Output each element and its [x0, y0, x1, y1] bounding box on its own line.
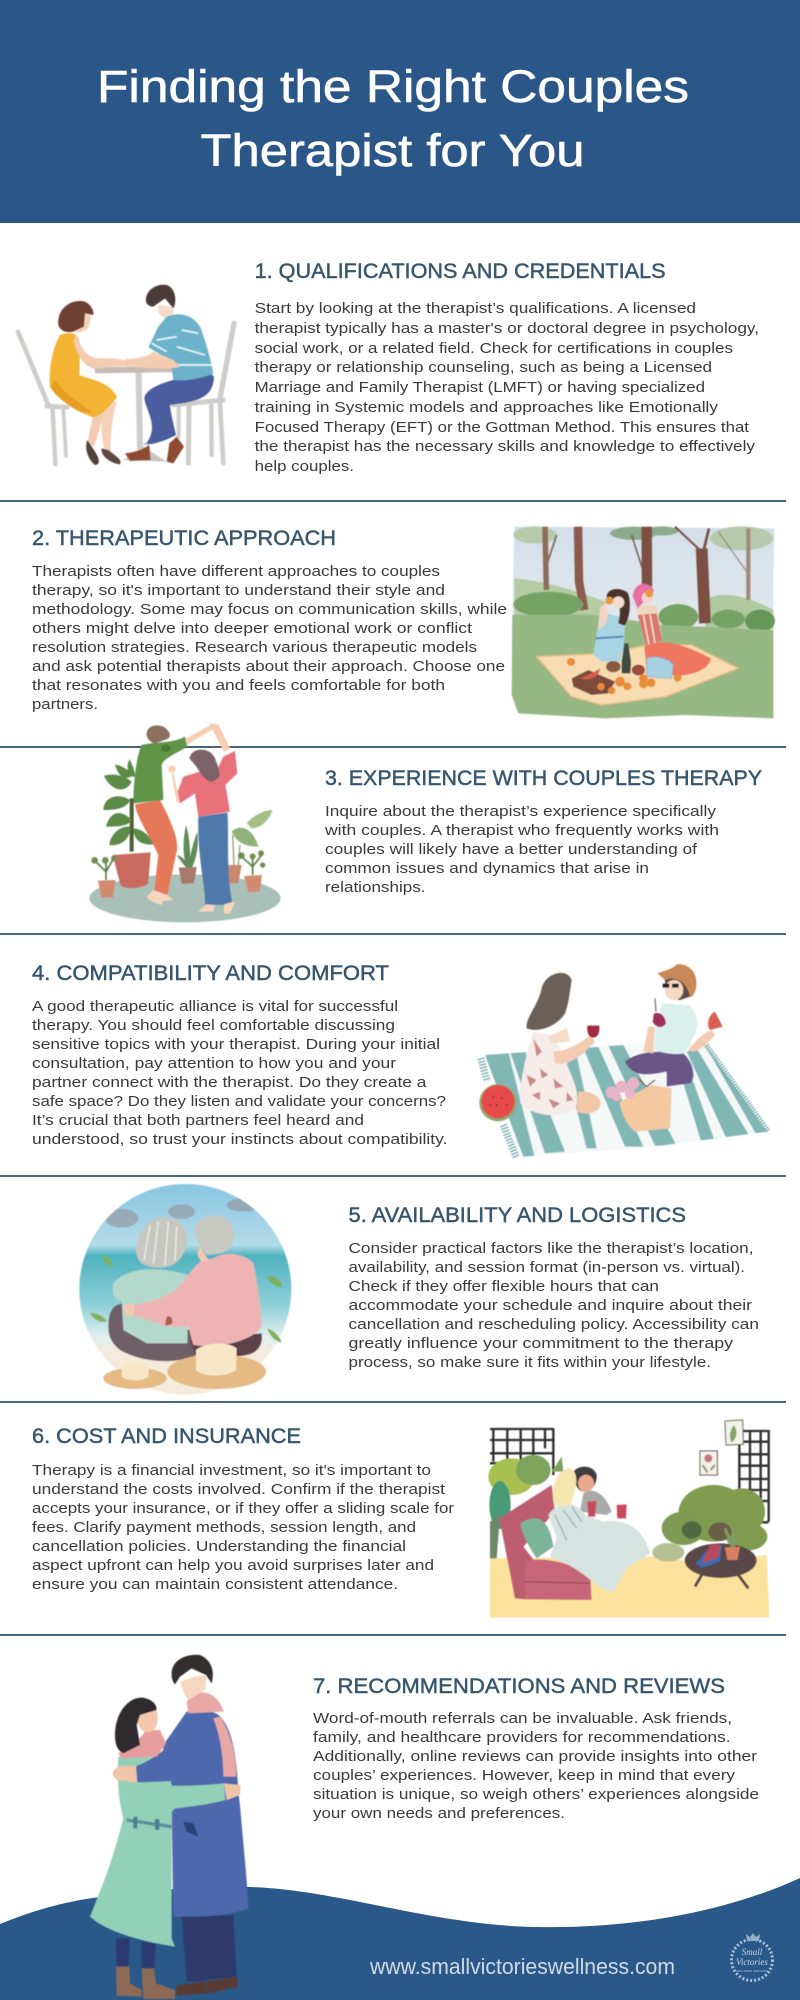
body text 4: It’s crucial that both partners feel heard and — [32, 1112, 364, 1129]
body text 1: Start by looking at the therapist’s qualifications. A licensed — [255, 300, 696, 317]
panel: qualifications and credentials — [18, 260, 759, 475]
body text 2: others might delve into deeper emotional work or conflict — [32, 620, 473, 637]
panel: recommendations and reviews — [90, 1655, 759, 1999]
illustration: embracing couple in winter coats — [90, 1655, 248, 1999]
body text 2: Therapists often have different approaches to couples — [32, 563, 440, 580]
panel: therapeutic approach — [32, 526, 775, 718]
heading 6: 6. COST AND INSURANCE — [32, 1425, 301, 1448]
body text 5: accommodate your schedule and inquire about their — [348, 1297, 752, 1314]
title: Finding the Right Couples — [97, 61, 689, 112]
body text 3: couples will likely have a better understanding of — [325, 841, 698, 858]
body text 2: and ask potential therapists about their approach. Choose one — [32, 658, 505, 675]
illustration: picnic in a park — [512, 526, 775, 718]
panel: compatibility and comfort — [32, 962, 768, 1158]
body text 6: accepts your insurance, or if they offer a sliding scale for — [32, 1500, 454, 1517]
body text 6: understand the costs involved. Confirm if the therapist — [32, 1481, 446, 1498]
body text 3: Inquire about the therapist’s experience specifically — [325, 803, 717, 820]
footer website address: www.smallvictorieswellness.com — [369, 1954, 675, 1979]
body text 2 — [32, 563, 507, 713]
illustration: couple on a sofa with plants — [488, 1420, 769, 1618]
footer wave — [0, 1878, 800, 2000]
body text 7: Additionally, online reviews can provide insights into other — [313, 1748, 757, 1765]
footer logo badge: WELLNESS SERVICES — [736, 1969, 768, 1973]
body text 1: therapy or relationship counseling, such as being a Licensed — [255, 359, 712, 376]
body text 3: with couples. A therapist who frequently works with — [324, 822, 719, 839]
body text 5: greatly influence your commitment to the therapy — [348, 1335, 734, 1352]
body text 1: help couples. — [255, 458, 354, 475]
title: Therapist for You — [200, 125, 584, 176]
body text 1: Marriage and Family Therapist (LMFT) or having specialized — [255, 379, 705, 396]
body text 1 — [255, 300, 759, 475]
body text 5: cancellation and rescheduling policy. Accessibility can — [348, 1316, 759, 1333]
footer logo badge — [732, 1933, 772, 1980]
body text 5: process, so make sure it fits within your lifestyle. — [348, 1354, 711, 1371]
footer logo badge: Victories — [736, 1957, 768, 1967]
illustration: two women on a striped blanket — [479, 964, 768, 1158]
heading 7: 7. RECOMMENDATIONS AND REVIEWS — [313, 1675, 725, 1698]
panel: availability and logistics — [77, 1180, 759, 1397]
heading 1: 1. QUALIFICATIONS AND CREDENTIALS — [255, 260, 666, 283]
body text 7: family, and healthcare providers for recommendations. — [313, 1729, 731, 1746]
body text 7: situation is unique, so weigh others’ experiences alongside — [313, 1786, 759, 1803]
illustration: couple dancing among plants — [89, 723, 281, 922]
panel: cost and insurance — [32, 1420, 769, 1618]
body text 6 — [32, 1462, 454, 1593]
body text 7: your own needs and preferences. — [313, 1805, 565, 1822]
body text 4: consultation, pay attention to how you and your — [32, 1055, 396, 1072]
body text 7: couples’ experiences. However, keep in mind that every — [313, 1767, 736, 1784]
body text 7 — [313, 1710, 759, 1822]
body text 3 — [324, 803, 719, 896]
body text 2: partners. — [32, 696, 98, 713]
body text 2: resolution strategies. Research various therapeutic models — [32, 639, 477, 656]
body text 2: methodology. Some may focus on communication skills, while — [32, 601, 507, 618]
heading 4: 4. COMPATIBILITY AND COMFORT — [32, 962, 389, 985]
body text 4: partner connect with the therapist. Do they create a — [32, 1074, 427, 1091]
body text 1: Focused Therapy (EFT) or the Gottman Method. This ensures that — [255, 419, 750, 436]
body text 4: sensitive topics with your therapist. During your initial — [32, 1036, 440, 1053]
body text 1: the therapist has the necessary skills and knowledge to effectively — [255, 438, 756, 455]
body text 2: that resonates with you and feels comfortable for both — [32, 677, 445, 694]
header banner — [0, 0, 800, 223]
body text 4 — [32, 998, 448, 1148]
body text 3: relationships. — [325, 879, 426, 896]
body text 6: ensure you can maintain consistent attendance. — [32, 1576, 398, 1593]
body text 5 — [348, 1240, 759, 1371]
body text 1: therapist typically has a master's or doctoral degree in psychology, — [255, 320, 759, 337]
heading 3: 3. EXPERIENCE WITH COUPLES THERAPY — [325, 767, 762, 790]
body text 4: understood, so trust your instincts about compatibility. — [32, 1131, 448, 1148]
body text 3: common issues and dynamics that arise in — [325, 860, 649, 877]
illustration: couple at a table — [18, 285, 234, 465]
body text 6: aspect upfront can help you avoid surprises later and — [32, 1557, 434, 1574]
heading 2: 2. THERAPEUTIC APPROACH — [32, 527, 336, 550]
body text 5: Check if they offer flexible hours that can — [348, 1278, 659, 1295]
body text 4: A good therapeutic alliance is vital for successful — [32, 998, 398, 1015]
panel: experience with couples therapy — [89, 723, 762, 922]
body text 5: availability, and session format (in-person vs. virtual). — [348, 1259, 745, 1276]
body text 6: cancellation policies. Understanding the financial — [32, 1538, 406, 1555]
body text 4: safe space? Do they listen and validate your concerns? — [32, 1093, 446, 1110]
title — [97, 61, 689, 176]
footer logo badge: Small — [742, 1947, 763, 1957]
illustration: elderly couple on the beach — [77, 1180, 297, 1397]
heading 5: 5. AVAILABILITY AND LOGISTICS — [348, 1204, 686, 1227]
body text 5: Consider practical factors like the therapist’s location, — [348, 1240, 754, 1257]
body text 6: Therapy is a financial investment, so it's important to — [32, 1462, 431, 1479]
body text 1: social work, or a related field. Check for certifications in couples — [255, 340, 733, 357]
body text 2: therapy, so it's important to understand their style and — [32, 582, 445, 599]
body text 4: therapy. You should feel comfortable discussing — [32, 1017, 395, 1034]
body text 6: fees. Clarify payment methods, session length, and — [32, 1519, 416, 1536]
body text 1: training in Systemic models and approaches like Emotionally — [255, 399, 719, 416]
body text 7: Word-of-mouth referrals can be invaluable. Ask friends, — [313, 1710, 732, 1727]
